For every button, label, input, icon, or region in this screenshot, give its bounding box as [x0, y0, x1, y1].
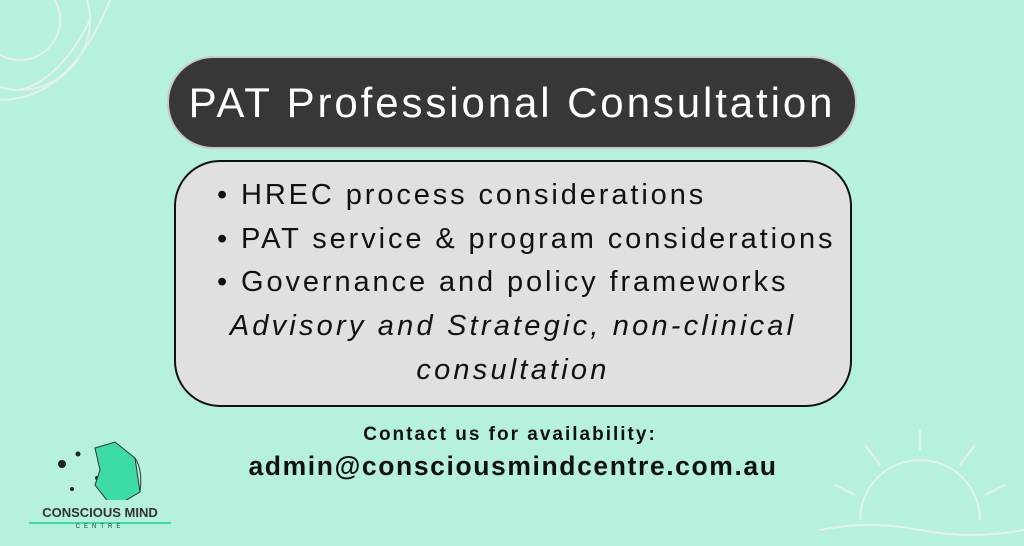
logo [29, 442, 171, 530]
title pill: PAT Professional Consultation [189, 78, 835, 126]
decorative sun bottom-right [820, 430, 1024, 536]
title pill [167, 56, 857, 149]
italic note: Advisory and Strategic, non-clinical [230, 310, 796, 342]
email: admin@consciousmindcentre.com.au [248, 451, 778, 481]
bullet list [218, 179, 835, 298]
content box [174, 160, 852, 407]
logo: CONSCIOUS MIND [42, 505, 158, 520]
bullet list: Governance and policy frameworks [241, 266, 788, 298]
bullet list: HREC process considerations [241, 179, 706, 211]
logo: CENTRE [76, 524, 124, 530]
decorative mandala top-left [0, 0, 111, 101]
italic note: consultation [416, 354, 610, 386]
contact text: Contact us for availability: [363, 424, 657, 445]
bullet list: PAT service & program considerations [241, 222, 835, 254]
italic note [228, 310, 796, 386]
